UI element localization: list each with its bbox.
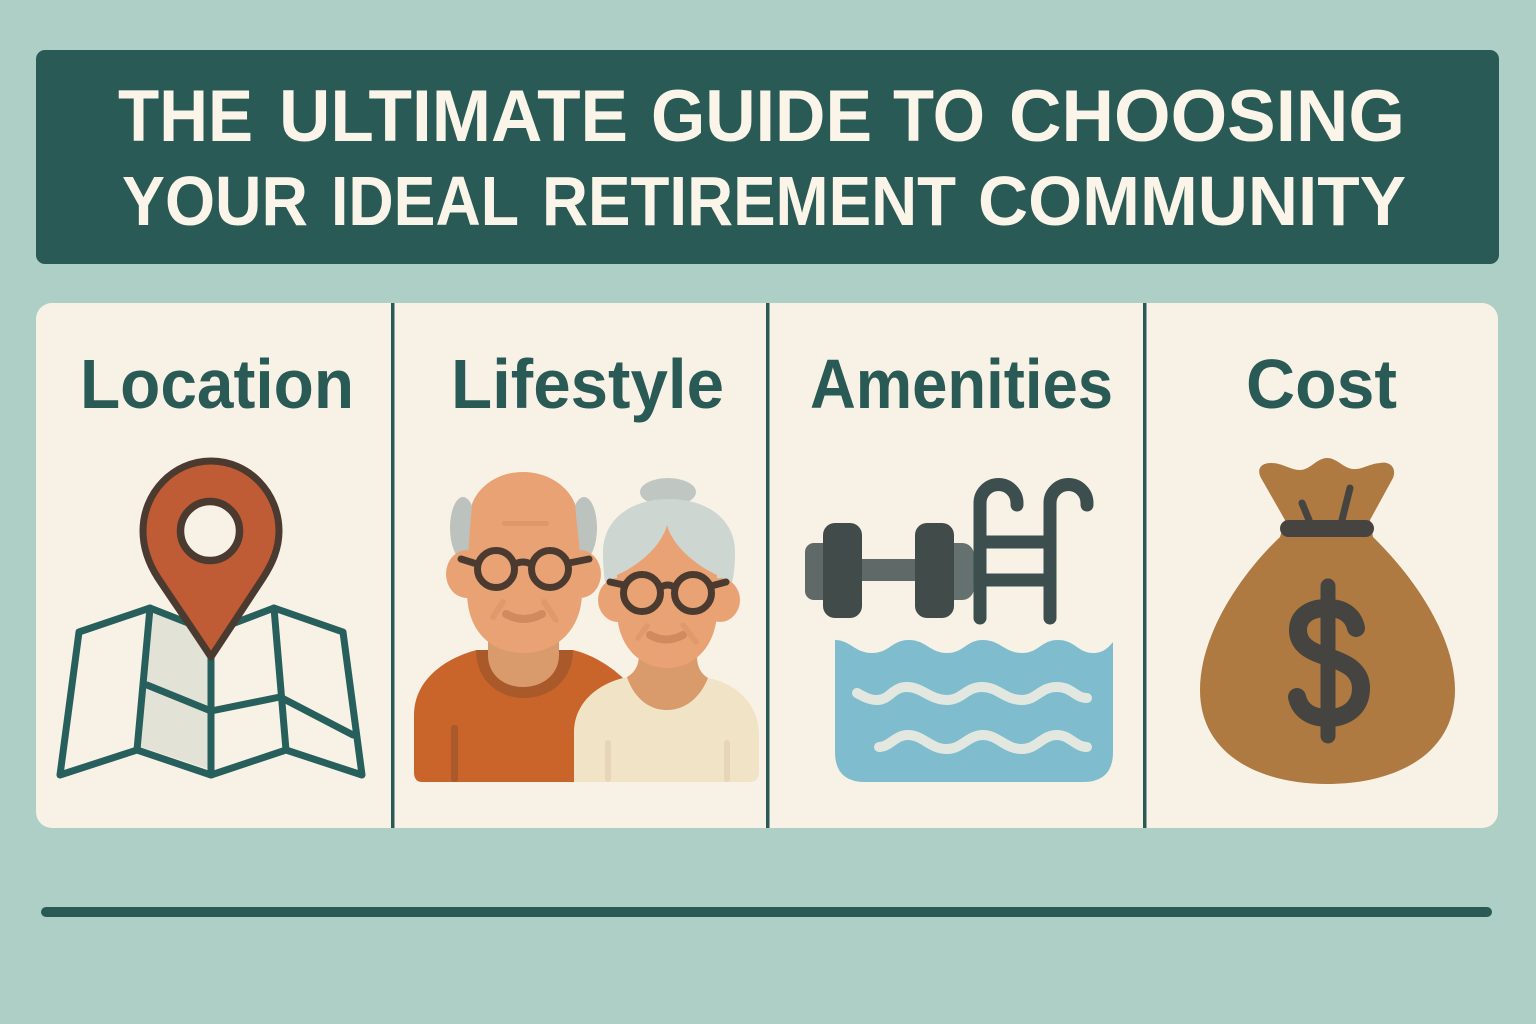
title line 1: ULTIMATE [279,76,628,157]
title line 2: RETIREMENT [542,162,956,240]
icon: dumbbell and pool [805,484,1113,782]
title line 2 [122,162,1406,240]
icon: elderly couple [414,472,759,782]
bottom rule [41,907,1492,917]
heading: Lifestyle: Lifestyle [451,345,724,423]
title line 1 [118,76,1405,157]
panel: four factors [36,303,1498,828]
water ripples [857,687,1087,749]
title line 1: GUIDE [651,76,872,157]
heading: Cost: Cost [1246,345,1397,423]
pool water [835,640,1113,782]
title line 2: IDEAL [331,162,519,240]
woman [574,478,759,782]
icon: map with location pin [60,461,362,775]
dollar sign [1297,586,1361,736]
man [414,472,623,782]
title line 2: YOUR [122,162,308,240]
map [60,608,362,775]
pool ladder [980,484,1087,618]
title banner [36,50,1499,264]
title line 1: THE [118,76,253,157]
location pin [143,461,279,657]
title line 1: CHOOSING [1009,76,1405,157]
title line 1: TO [893,76,985,157]
bag ties [1280,488,1374,537]
bag [1200,458,1455,784]
heading: Amenities: Amenities [810,345,1113,423]
heading: Location: Location [80,345,354,423]
icon: money bag [1200,458,1455,784]
title line 2: COMMUNITY [978,162,1406,240]
dumbbell [805,523,974,618]
